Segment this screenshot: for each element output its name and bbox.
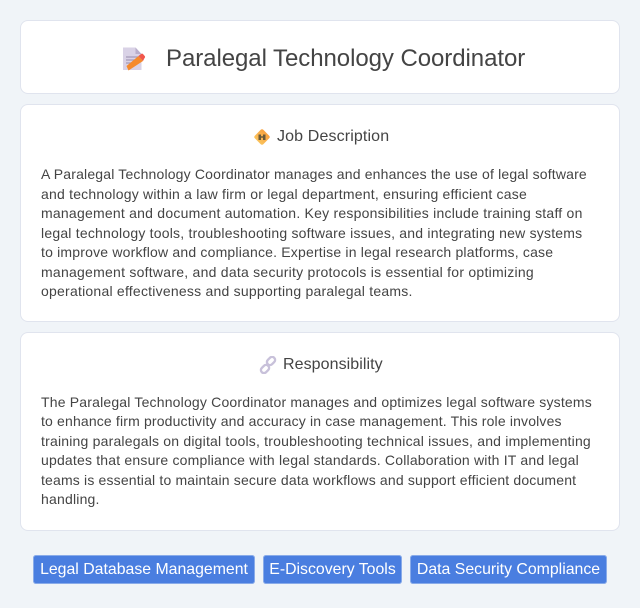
text block: responsibility: The Paralegal Technology Coordinator manages and optimizes legal software systems [41, 394, 592, 410]
panel: responsibility [20, 332, 620, 531]
icon: warning diamond [254, 129, 270, 145]
heading: job description: Job Description [277, 128, 389, 145]
tag: e-discovery tools [263, 555, 402, 584]
text block: job description: A Paralegal Technology Coordinator manages and enhances the use of legal software [41, 166, 587, 182]
text block: job description: operational effectiveness and supporting paralegal teams. [41, 283, 413, 299]
text block: job description: to improve workflow and compliance. Expertise in legal research platforms, case [41, 244, 553, 260]
text block: responsibility [41, 394, 592, 507]
tag: data security compliance [410, 555, 607, 584]
text block: job description: management software, and data security protocols is essential for optimizing [41, 264, 534, 280]
text block: job description [41, 166, 587, 299]
title: Paralegal Technology Coordinator [166, 45, 525, 72]
text block: responsibility: training paralegals on digital tools, troubleshooting technical issues, and implementing [41, 433, 591, 449]
tag: data security compliance: Data Security Compliance [417, 561, 600, 578]
text block: job description: and technology within a law firm or legal department, ensuring efficient case [41, 186, 527, 202]
icon: chain link [260, 356, 276, 374]
tag: legal database management [33, 555, 255, 584]
text block: responsibility: updates that ensure compliance with legal standards. Collaboration with IT and legal [41, 452, 579, 468]
icon: document with pencil [123, 48, 146, 70]
panel: title [20, 20, 620, 94]
panel: job description [20, 104, 620, 322]
text block: job description: legal technology tools, troubleshooting software issues, and integrating new systems [41, 225, 582, 241]
heading: responsibility: Responsibility [283, 356, 383, 373]
text block: responsibility: teams is essential to maintain secure data workflows and support efficient document [41, 472, 576, 488]
text block: responsibility: handling. [41, 491, 100, 507]
tag: legal database management: Legal Database Management [40, 561, 248, 578]
text block: responsibility: to enhance firm productivity and accuracy in case management. This role involves [41, 413, 562, 429]
text block: job description: management and document automation. Key responsibilities include training staff on [41, 205, 583, 221]
tag: e-discovery tools: E-Discovery Tools [269, 561, 396, 578]
